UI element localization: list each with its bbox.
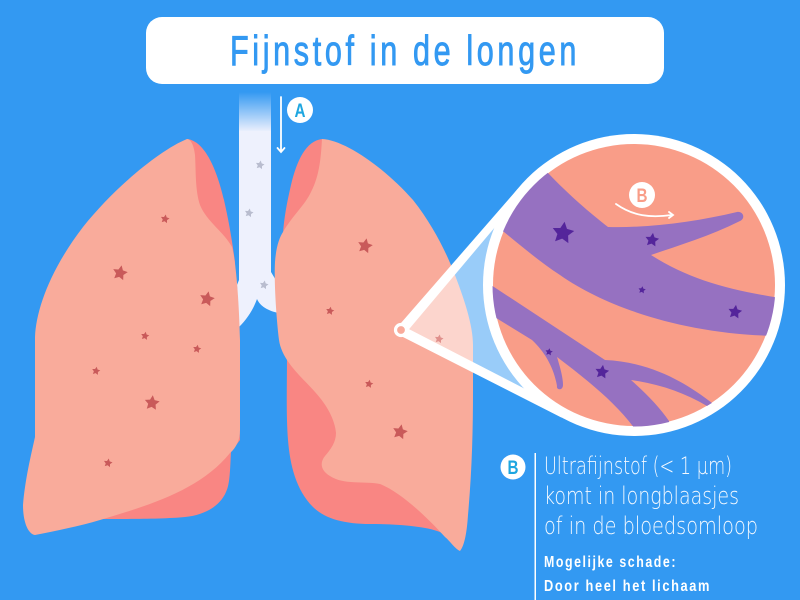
magnifier cone [396,189,566,418]
lower blood vessel [492,286,712,426]
arrow A [278,97,284,152]
legend divider [534,453,536,600]
legend text: komt in longblaasjes [544,482,739,510]
left lung [23,139,240,535]
magnified circle [483,134,785,440]
title: Fijnstof in de longen [230,27,580,74]
badge B in circle: B [636,186,648,207]
legend text: Door heel het lichaam [544,578,711,595]
legend text: Ultrafijnstof (< 1 µm) [544,452,732,480]
legend text [544,452,758,595]
badge A: A [294,101,306,122]
title [146,17,664,84]
badge B legend [500,454,526,480]
badge B in circle [629,182,655,208]
badge A [287,97,313,123]
right lung [275,139,473,551]
badge B legend: B [508,458,518,479]
curved arrow B [616,204,673,218]
trachea [237,92,279,327]
upper blood vessel [503,172,775,336]
legend text: Mogelijke schade: [544,554,677,571]
